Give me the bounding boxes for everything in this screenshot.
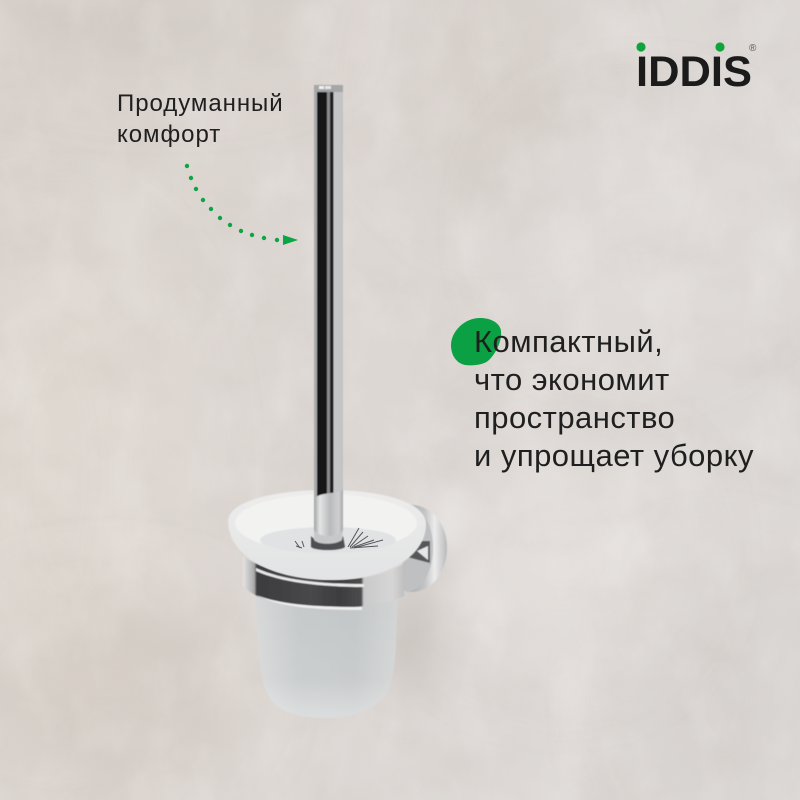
frosted glass cup [255, 590, 398, 718]
logo: IDDIS: ® [749, 43, 757, 54]
wall mount [403, 505, 447, 592]
callout: comfort [117, 90, 284, 148]
callout: compact: что экономит [474, 362, 670, 397]
frosted glass dish [228, 490, 426, 580]
green blob [451, 318, 501, 365]
logo: IDDIS: IDDIS [636, 48, 752, 96]
callout: compact: пространство [474, 400, 675, 435]
callout: compact [474, 324, 754, 473]
callout: compact: Компактный, [474, 324, 663, 359]
callout: comfort: комфорт [117, 121, 221, 148]
brush bristles [295, 528, 383, 548]
callout: compact: и упрощает уборку [474, 438, 754, 473]
brush rod [311, 85, 345, 550]
chrome ring [243, 556, 405, 610]
dotted arrow [185, 164, 298, 245]
shadow on wall [386, 486, 464, 710]
callout: comfort: Продуманный [117, 90, 284, 117]
